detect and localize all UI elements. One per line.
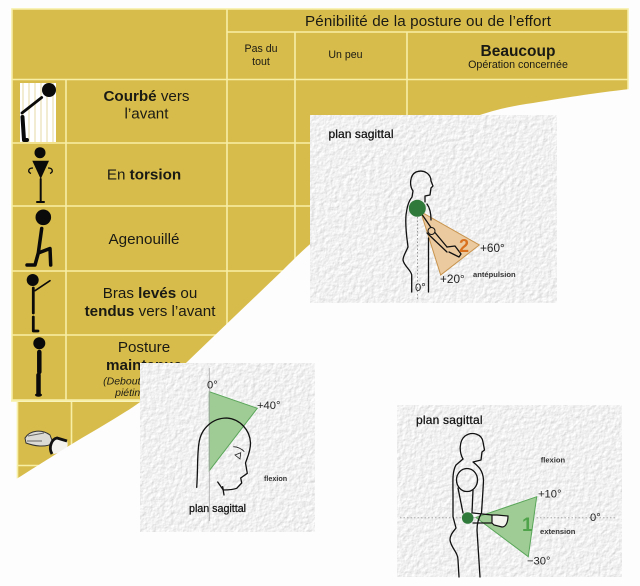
silhouette <box>403 171 461 292</box>
number 2: 2 <box>459 236 469 256</box>
row label: Courbé vers l'avant: Courbé vers <box>103 88 190 105</box>
row label: Posture maintenue: (Debout ou assis, <box>103 376 185 388</box>
angle 0: 0° <box>207 380 218 392</box>
panel background: paper <box>140 363 315 532</box>
panel: forearm flexion extension <box>397 405 622 577</box>
icon: kneeling <box>27 210 51 265</box>
heading: table title: Pénibilité de la posture ou de l’effort <box>305 13 552 30</box>
angle +40: +40° <box>257 400 280 412</box>
number 1: 1 <box>522 515 533 536</box>
angle 0: 0° <box>590 512 601 524</box>
row label: Bras levés ou tendus vers l'avant: Bras levés ou <box>103 285 197 302</box>
icon: raised arms <box>27 274 50 331</box>
column header: Pas du tout: Pas du <box>245 43 278 55</box>
icon: torsion <box>29 147 52 202</box>
panel background: paper <box>397 405 622 577</box>
silhouette <box>450 434 508 577</box>
column header: Pas du tout: tout <box>252 56 270 68</box>
row label: Bras levés ou tendus vers l'avant: tendus vers l’avant <box>85 303 215 320</box>
green range triangle <box>209 392 257 471</box>
dashed horizontal axis <box>400 517 617 519</box>
row label: Agenouillé: Agenouillé <box>109 231 179 248</box>
label: flexion: flexion <box>264 474 287 483</box>
orange range triangle <box>421 212 479 275</box>
angle +10: +10° <box>538 488 561 500</box>
column header: Beaucoup: Opération concernée <box>468 59 568 71</box>
label: extension: extension <box>540 527 576 536</box>
row label: Posture maintenue: Posture <box>118 339 170 356</box>
panel: head flexion <box>140 363 315 532</box>
row label: Courbé vers l'avant: l’avant <box>125 106 169 122</box>
label: flexion: flexion <box>541 456 566 464</box>
vertical axis <box>208 368 210 521</box>
column header: Pas du tout <box>245 43 278 68</box>
column header: Beaucoup: Beaucoup <box>481 43 555 60</box>
icon: bent forward <box>20 83 56 142</box>
row label: En torsion: En torsion <box>107 166 181 184</box>
angle 0: 0° <box>415 282 426 294</box>
angle -30: −30° <box>527 556 550 568</box>
label: plan sagittal: plan sagittal <box>189 503 246 515</box>
shoulder joint <box>409 200 426 217</box>
row label: Posture maintenue <box>103 339 185 399</box>
head outline <box>197 418 250 495</box>
row label: Posture maintenue: maintenue <box>106 357 182 374</box>
label: plan sagittal: plan sagittal <box>328 127 394 141</box>
angle +60: +60° <box>480 241 505 255</box>
panel background: paper <box>310 115 557 303</box>
angle +20: +20° <box>440 272 465 286</box>
icon: hand and wrist <box>25 431 68 454</box>
row label: Posture maintenue: piétinement) <box>114 387 173 399</box>
icon: held posture <box>33 337 45 397</box>
column header: Beaucoup <box>468 43 568 71</box>
label: plan sagittal: plan sagittal <box>416 413 482 427</box>
label: antépulsion: antépulsion <box>473 270 516 279</box>
dotted vertical axis <box>416 210 418 300</box>
green range triangle <box>476 497 537 557</box>
panel: upper arm anteposition <box>310 115 557 303</box>
column header: Un peu: Un peu <box>328 49 363 61</box>
elbow joint <box>462 512 474 524</box>
